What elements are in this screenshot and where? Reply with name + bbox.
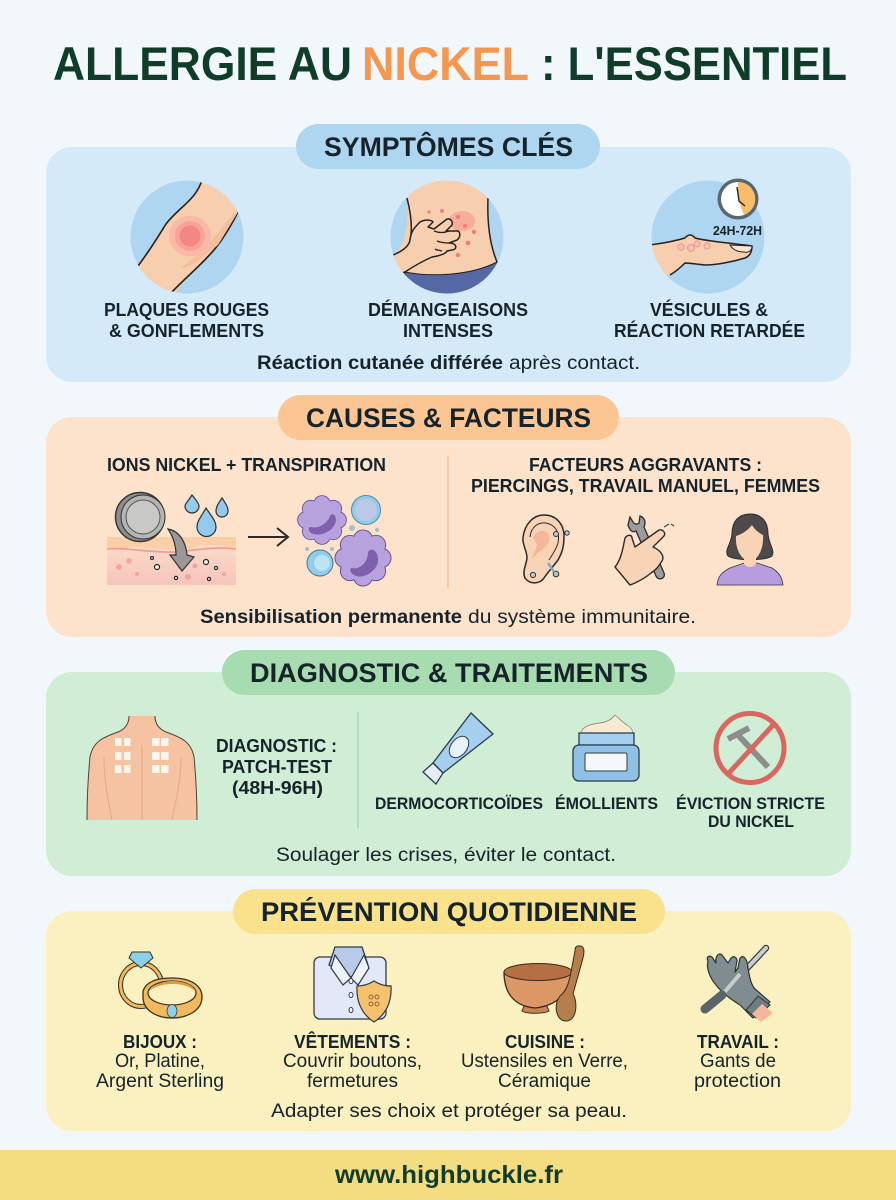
heading: symptômes clés: SYMPTÔMES CLÉS [324, 131, 573, 162]
heading: causes & facteurs [278, 395, 619, 440]
panel: causes & facteurs [46, 395, 851, 637]
icon: blisters on finger with clock [645, 178, 764, 294]
text: vésicules: VÉSICULES & [650, 299, 768, 320]
text: travail [694, 1032, 781, 1092]
text: vêtements: fermetures [307, 1071, 398, 1092]
text: émollients: ÉMOLLIENTS [555, 794, 658, 813]
text: diagnostic patch-test [216, 736, 337, 798]
text: démangeaisons: INTENSES [403, 321, 493, 341]
text: bijoux: Argent Sterling [96, 1071, 224, 1092]
footer [0, 1150, 896, 1200]
text: dermocorticoïdes: DERMOCORTICOÏDES [375, 795, 543, 813]
text: facteurs aggravants [471, 455, 820, 496]
icon: skin with coin and drops [107, 492, 236, 585]
text: cuisine: Ustensiles en Verre, [461, 1051, 628, 1072]
icon: scratching hand [390, 180, 504, 294]
panel: prévention quotidienne [46, 889, 851, 1131]
text: travail: protection [694, 1071, 781, 1092]
icon: protective glove and tool [705, 948, 773, 1022]
text: plaques rouges: & GONFLEMENTS [109, 321, 264, 341]
text: diagnostic patch-test: DIAGNOSTIC : [216, 736, 337, 756]
text: vêtements [283, 1031, 422, 1092]
title: : L'ESSENTIEL [541, 37, 847, 90]
divider [447, 456, 449, 588]
text: facteurs aggravants: FACTEURS AGGRAVANTS : [529, 455, 762, 475]
panel: symptômes clés [46, 124, 851, 382]
text: diagnostic patch-test: (48H-96H) [232, 778, 323, 798]
title: ALLERGIE AU [53, 37, 352, 90]
text: cuisine: CUISINE : [505, 1032, 585, 1052]
icon: blisters on finger with clock: 24H-72H [713, 224, 762, 238]
panel: diagnostic & traitements [46, 650, 851, 876]
text: démangeaisons: DÉMANGEAISONS [368, 299, 528, 320]
icon: cream tube [423, 713, 493, 784]
title [53, 37, 847, 90]
text: plaques rouges: PLAQUES ROUGES [104, 300, 269, 320]
divider [357, 712, 359, 828]
title: NICKEL [362, 37, 529, 90]
text: ions nickel: IONS NICKEL + TRANSPIRATION [107, 455, 386, 475]
arrow [248, 528, 288, 546]
text: plaques rouges [104, 300, 269, 341]
heading: causes & facteurs: CAUSES & FACTEURS [306, 403, 591, 433]
text: éviction stricte: ÉVICTION STRICTE [676, 794, 825, 813]
text: vésicules [614, 299, 805, 341]
text: éviction stricte [676, 794, 825, 831]
text: bijoux [96, 1032, 224, 1092]
icon: shirt with shield [314, 947, 391, 1022]
icon: no nickel sign [716, 714, 784, 782]
icon: red patch on arm [130, 180, 245, 300]
text: cuisine [461, 1032, 628, 1092]
text: vésicules: RÉACTION RETARDÉE [614, 320, 805, 341]
caption: sensibilisation [200, 607, 696, 628]
caption: réaction cutanée: après contact. [509, 353, 640, 374]
text: démangeaisons [368, 299, 528, 341]
text: diagnostic patch-test: PATCH-TEST [222, 757, 332, 777]
icon: back with patches [87, 716, 197, 820]
icon: emollient jar [573, 715, 639, 781]
caption: soulager: Soulager les crises, éviter le contact. [276, 845, 616, 866]
caption: réaction cutanée: Réaction cutanée différée [257, 353, 503, 374]
caption: adapter ses choix: Adapter ses choix et protéger sa peau. [271, 1101, 627, 1122]
text: cuisine: Céramique [498, 1071, 591, 1092]
text: vêtements: Couvrir boutons, [283, 1051, 422, 1072]
icon: woman [717, 514, 783, 585]
text: travail: TRAVAIL : [697, 1032, 779, 1052]
heading: prévention quotidienne [233, 889, 665, 934]
heading: prévention quotidienne: PRÉVENTION QUOTIDIENNE [261, 896, 637, 927]
icon: clock [718, 178, 758, 220]
caption: sensibilisation: du système immunitaire. [468, 607, 696, 628]
text: bijoux: BIJOUX : [123, 1032, 197, 1052]
footer: www.highbuckle.fr [334, 1161, 563, 1189]
text: travail: Gants de [700, 1051, 776, 1072]
heading: symptômes clés [296, 124, 600, 169]
heading: diagnostic & traitements [222, 650, 675, 695]
icon: rings [120, 952, 202, 1018]
text: bijoux: Or, Platine, [115, 1051, 205, 1072]
heading: diagnostic & traitements: DIAGNOSTIC & TRAITEMENTS [250, 658, 648, 688]
icon: bowl and spoon [504, 946, 584, 1021]
text: facteurs aggravants: PIERCINGS, TRAVAIL MANUEL, FEMMES [471, 476, 820, 496]
icon: immune cells [297, 495, 392, 587]
text: vêtements: VÊTEMENTS : [294, 1031, 411, 1052]
caption: réaction cutanée [257, 353, 640, 374]
icon: hand with wrench [615, 516, 674, 585]
icon: pierced ear [523, 515, 569, 583]
caption: sensibilisation: Sensibilisation permanente [200, 607, 462, 628]
text: éviction stricte: DU NICKEL [708, 813, 794, 831]
